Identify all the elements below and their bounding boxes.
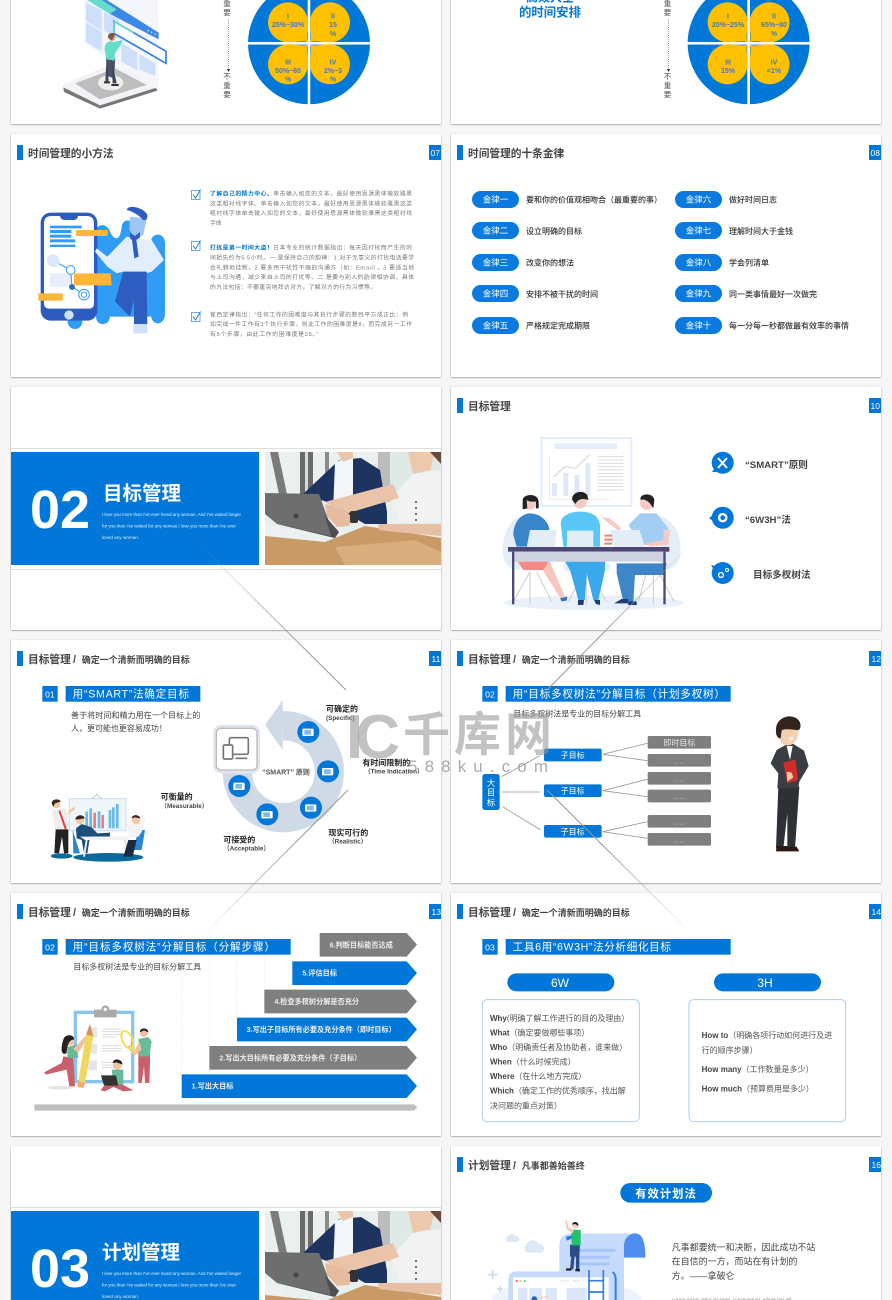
label: acceptable (223, 834, 270, 853)
blue title block: 03 (30, 1239, 90, 1299)
step 3 (237, 1018, 417, 1041)
tip 1: 粗衬线字体单击输入如您的文本，最好使用思源黑体微软雅黑这类粗衬线 (210, 209, 412, 217)
tip 2: 会礼貌地挂断，2.要多用干扰性不强的沟通方（如：Email），3.要适当地 (210, 263, 414, 271)
slide header (17, 145, 441, 160)
panel: slide 06 quadrant elite time (451, 0, 881, 124)
illustration: man with phone (38, 207, 165, 333)
pie: four quadrant time share: IV (771, 60, 778, 66)
pie: four quadrant time share: <1% (767, 68, 782, 75)
slide header: 确定一个清新而明确的目标 (82, 907, 190, 918)
slide header: 12 (872, 654, 881, 664)
leaf goals: …… (673, 838, 685, 844)
slide header: 16 (872, 1160, 881, 1170)
slide header: 08 (870, 148, 880, 158)
panel: section 02 cover (11, 387, 441, 630)
pie: four quadrant time share: III (725, 60, 731, 66)
slide header: / (73, 907, 76, 919)
tip 3: 如完成一件工作有3个执行步骤，则此工作的困难度是9，而完成另一工作 (210, 320, 412, 328)
slide header: / (73, 654, 76, 666)
rule 9: 金律九 (686, 288, 712, 298)
label: realistic (328, 827, 368, 845)
rule 3: 改变你的想法 (526, 258, 574, 268)
label: acceptable: （Acceptable） (223, 845, 270, 853)
card: 6W list: Which（确定工作的优秀顺序，找出解 (490, 1086, 626, 1096)
pie: four quadrant time share: 25%~30% (272, 22, 305, 29)
tip 2: 与上司沟通，减少来自上司的打扰等。二.是要与别人的韵律相协调，具体 (210, 273, 414, 281)
illustration: isometric man at window (63, 0, 166, 109)
axis: important to not important: 要 (664, 90, 672, 99)
quote: 方。——拿破仑 (672, 1270, 735, 1281)
pie: four quadrant time share (247, 0, 371, 105)
rule 3: 金律三 (483, 258, 508, 268)
pie: four quadrant time share: I (727, 14, 729, 20)
pie: four quadrant time share: II (331, 14, 335, 20)
tip 3: 有5个步骤，由此工作的困难度是25。” (210, 330, 318, 338)
tip 1: 了解自己的精力中心。单击输入如您的文本，最好使用思源黑体微软雅黑 (210, 190, 412, 198)
pie: four quadrant time share: % (330, 76, 337, 84)
rule 10 (675, 317, 849, 334)
card: 3H list (689, 1000, 846, 1122)
photo: two people at a laptop (265, 1211, 441, 1300)
pill: 3H: 3H (757, 976, 773, 990)
label: acceptable: 可接受的 (223, 834, 255, 844)
label: time indication: 有时间限制的 (362, 757, 410, 767)
step 1: 1.写出大目标 (192, 1082, 233, 1091)
label: realistic: （Realistic） (328, 837, 367, 845)
label: measurable (161, 792, 208, 810)
step 3: 3.写出子目标所有必要及充分条件（即时目标） (247, 1025, 396, 1034)
step 6 (320, 933, 417, 957)
slide header: 目标管理 (28, 906, 71, 919)
axis: important to not important: 要 (664, 8, 672, 17)
step heading 03: 03 (485, 942, 495, 952)
slide header: 目标管理 (468, 653, 511, 666)
step heading 02 (482, 686, 731, 702)
slide header: 确定一个清新而明确的目标 (522, 654, 630, 665)
slide header (17, 904, 441, 919)
illustration: businessman with red folder (771, 716, 809, 851)
watermark: 588ku logo and text: IC (346, 703, 400, 772)
leaf goals: …… (673, 759, 685, 765)
axis: important to not important: 要 (223, 90, 231, 99)
blue title block: 02 (30, 480, 90, 540)
label: realistic: 现实可行的 (328, 827, 368, 837)
tip 1: 这类粗衬线字体。单击输入如您的文本，最好使用思源黑体微软雅黑这类 (210, 199, 412, 207)
axis: important to not important (223, 0, 231, 99)
leaf goals: …… (673, 795, 685, 801)
rule 7 (675, 222, 793, 239)
pill: effective planning: 有效计划法 (635, 1187, 697, 1201)
tip 2: 的方法包括：不要唐突地拜访对方，了解对方的行为习惯等。 (210, 283, 376, 291)
tip 3 (192, 310, 412, 338)
root node: 目 (487, 788, 495, 798)
pie: four quadrant time share: 15% (721, 68, 736, 75)
pie: four quadrant time share: 20%~25% (712, 22, 745, 29)
photo: two people at a laptop (265, 452, 441, 565)
rule 6: 做好时间日志 (729, 194, 777, 204)
illustration: person on document with ladder (488, 1220, 645, 1300)
pie: four quadrant time share: 15 (329, 22, 337, 29)
item: goal tree (711, 562, 811, 584)
step 5: 5.评估目标 (302, 969, 337, 978)
description (71, 710, 200, 733)
rule 10: 金律十 (686, 320, 712, 330)
ring diagram: SMART cycle: “SMART” 原则 (262, 767, 310, 776)
panel: slide 13 decomposition steps (11, 893, 441, 1136)
watermark: 588ku logo and text: 588ku.com (408, 757, 548, 776)
blue title block (11, 1211, 259, 1300)
rule 1 (472, 191, 662, 208)
slide header: 时间管理的小方法 (28, 147, 114, 160)
leaf goals: …… (673, 820, 685, 826)
rule 8: 金律八 (686, 258, 712, 268)
label: time indication: （Time Indication） (364, 767, 423, 775)
illustration: business meeting (51, 794, 145, 862)
card: 6W list: 决问题的重点对策） (490, 1101, 562, 1111)
blue title block (11, 452, 259, 565)
pie: four quadrant time share: 50%~60 (275, 68, 301, 75)
slide header: / (513, 1160, 516, 1172)
pie: four quadrant time share: % (771, 31, 778, 38)
blue title block: loved any woman. (102, 1294, 139, 1299)
item: goal tree: 目标多杈树法 (753, 569, 811, 581)
rule 7: 金律七 (686, 226, 712, 236)
pill: effective planning (620, 1183, 712, 1203)
axis: important to not important: 不 (664, 72, 672, 81)
panel: slide 14 6W3H (451, 893, 881, 1136)
illustration: team meeting with chart (503, 438, 685, 610)
description: 人，更可能也更容易成功！ (71, 723, 167, 733)
card: 3H list: 行的顺序步骤） (702, 1045, 758, 1055)
tip 1: 字体 (210, 219, 222, 227)
step 5 (292, 961, 417, 985)
step heading 03: 工具6用“6W3H”法分析细化目标 (513, 941, 671, 954)
leaf goals: …… (673, 777, 685, 783)
item: SMART (712, 452, 808, 474)
step heading 01: 用“SMART”法确定目标 (73, 688, 189, 701)
step heading 02: 02 (45, 942, 55, 952)
panel: slide 08 ten golden rules (451, 134, 881, 377)
pill: 6W (507, 973, 614, 991)
step heading 02: 用“目标多杈树法”分解目标（分解步骤） (73, 941, 275, 954)
step 1 (182, 1074, 417, 1098)
rule 1: 要和你的价值观相吻合（最重要的事） (526, 194, 662, 204)
slide header: 目标管理 (468, 906, 511, 919)
list: time tips (192, 190, 414, 338)
slide header: 计划管理 (468, 1159, 511, 1172)
label: specific: (Specific) (326, 715, 354, 722)
panel: slide 12 goal tree (451, 640, 881, 883)
description: 目标多杈树法是专业的目标分解工具 (513, 708, 641, 718)
rule 5: 金律五 (483, 320, 509, 330)
rule 9: 同一类事情最好一次做完 (729, 289, 817, 299)
illustration: team with clipboard and pencil (44, 1005, 152, 1091)
quote: 凡事都要统一和决断，因此成功不站 (672, 1241, 815, 1252)
step heading 02 (42, 939, 291, 955)
rule 9 (675, 285, 817, 302)
rule 6 (675, 191, 777, 208)
root node (482, 774, 500, 810)
slide header (457, 398, 881, 413)
card: 3H list: How to（明确各项行动如何进行及进 (702, 1030, 832, 1040)
card: 6W list: Who（明确责任者及协助者，谁来做） (490, 1042, 627, 1052)
blue title block: for you than I've waited for any woman.I love you more than I've ever (102, 1282, 236, 1288)
rule 4 (472, 285, 598, 302)
pie: four quadrant time share: I (287, 14, 289, 20)
card: 6W list: Where（在什么地方完成） (490, 1071, 586, 1081)
rule 6: 金律六 (686, 194, 712, 204)
slide header: 14 (872, 907, 881, 917)
item: 6W3H (709, 507, 791, 529)
card: 6W list: When（什么时候完成） (490, 1057, 576, 1067)
axis: important to not important: 要 (223, 8, 231, 17)
step 4: 4.检查多杈树分解是否充分 (274, 997, 359, 1006)
step heading 01 (42, 686, 200, 702)
panel: slide 10 goal management overview (451, 387, 881, 630)
card: 6W list: Why(明确了解工作进行的目的及理由） (490, 1013, 629, 1023)
watermark: 588ku logo and text: 千库网 (403, 708, 556, 761)
tip 2 (192, 240, 414, 291)
label: specific (326, 704, 358, 722)
base arrow (34, 1104, 417, 1111)
step 2 (209, 1046, 417, 1070)
label: time indication (362, 757, 423, 775)
label: measurable: （Measurable） (161, 802, 208, 810)
axis: important to not important: 不 (223, 72, 231, 81)
slide header (457, 145, 881, 160)
panel: section 03 cover (11, 1146, 441, 1300)
slide header (457, 651, 881, 666)
root node: 标 (487, 797, 495, 807)
pie: four quadrant time share: 65%~80 (761, 22, 787, 29)
pie: four quadrant time share (687, 0, 811, 105)
card: 6W list (482, 1000, 639, 1122)
slide header: / (513, 654, 516, 666)
rule 4: 安排不被干扰的时间 (526, 289, 598, 299)
slide header (17, 651, 441, 666)
slide header: 目标管理 (468, 400, 511, 413)
heading: time arrangement: 的时间安排 (519, 4, 582, 20)
tree diagram (482, 736, 711, 846)
slide header: 13 (432, 907, 441, 917)
item: SMART: “SMART”原则 (745, 459, 808, 471)
rule 5 (472, 317, 590, 334)
rule 8 (675, 254, 769, 271)
step heading 02: 02 (485, 689, 495, 699)
slide header (457, 904, 881, 919)
slide header: 11 (432, 654, 441, 664)
rule 5: 严格规定完成期限 (526, 320, 590, 330)
description: 目标多杈树法是专业的目标分解工具 (73, 961, 201, 971)
pie: four quadrant time share: % (330, 31, 337, 38)
watermark: 588ku logo and text (195, 540, 693, 935)
step 4 (264, 990, 417, 1013)
quote (672, 1241, 815, 1300)
blue title block: 计划管理 (102, 1241, 180, 1264)
pie: four quadrant time share: % (285, 76, 292, 84)
pie: four quadrant time share: III (285, 60, 291, 66)
tip 2: 间损失约为5.5小时。一.是保持自己的韵律：1.对于无意义的打扰电话要学 (210, 253, 414, 261)
description: 善于将时间和精力用在一个目标上的 (71, 710, 200, 720)
rule 1: 金律一 (483, 194, 509, 204)
axis: important to not important: 重 (664, 81, 672, 90)
axis: important to not important (664, 0, 672, 99)
tip 2: 打扰是第一时间大盗！日本专业的统计数据指出：每天因打扰而产生的时 (210, 244, 412, 252)
blue title block: for you than I've waited for any woman.I love you more than I've ever (102, 524, 236, 528)
panel: slide 07 small methods (11, 134, 441, 377)
sub goals (544, 749, 602, 838)
slide header: 目标管理 (28, 653, 71, 666)
slide header: 10 (870, 401, 880, 411)
slide header: 凡事都善始善终 (522, 1160, 585, 1171)
quote: 在自信的一方，而站在有计划的 (672, 1256, 797, 1267)
pie: four quadrant time share: II (772, 14, 776, 20)
rule 10: 每一分每一秒都做最有效率的事情 (729, 320, 849, 330)
step heading 02: 用“目标多杈树法”分解目标（计划多杈树） (513, 688, 725, 701)
leaf goals: 即时目标 (663, 737, 695, 747)
panel: slide 16 plan management (451, 1146, 881, 1300)
root node: 大 (487, 778, 495, 788)
slide header: / (513, 907, 516, 919)
rule 7: 理解时间大于金钱 (729, 226, 793, 236)
axis: important to not important: 重 (223, 81, 231, 90)
panel: slide 11 SMART (11, 640, 441, 883)
sub goals: 子目标 (561, 750, 585, 760)
pie: four quadrant time share: 2%~3 (324, 68, 342, 75)
pill: 3H (714, 973, 821, 991)
pill: 6W: 6W (551, 976, 570, 990)
ring diagram: SMART cycle (213, 700, 339, 825)
tip 3: 崔西定律指出：“任何工作的困难度与其执行步骤的数目平方成正比：例 (210, 310, 408, 318)
sub goals: 子目标 (561, 826, 585, 836)
card: 3H list: How much（预算费用是多少） (702, 1084, 814, 1094)
label: specific: 可确定的 (326, 704, 358, 714)
step heading 03 (482, 939, 731, 955)
label: measurable: 可衡量的 (161, 792, 193, 802)
sub goals: 子目标 (561, 786, 585, 796)
slide header: 07 (430, 148, 440, 158)
rule 2 (472, 222, 582, 239)
slide header: 确定一个清新而明确的目标 (82, 654, 190, 665)
rule 3 (472, 254, 574, 271)
item: 6W3H: “6W3H”法 (745, 514, 791, 526)
rule 4: 金律四 (483, 288, 508, 298)
blue title block: loved any woman. (102, 535, 139, 540)
rule 2: 金律二 (483, 226, 509, 236)
blue title block: I love you more than I've ever loved any woman. And I've waited longer (102, 512, 241, 517)
tip 1 (192, 190, 412, 227)
slide header: 确定一个清新而明确的目标 (522, 907, 630, 918)
pie: four quadrant time share: IV (330, 60, 337, 66)
panel: slide 05 quadrant personal time (11, 0, 441, 124)
leaf goals (648, 736, 711, 846)
blue title block: I love you more than I've ever loved any woman. And I've waited longer (102, 1271, 241, 1276)
step 2: 2.写出大目标所有必要及充分条件（子目标） (219, 1053, 361, 1062)
rule 8: 学会列清单 (729, 258, 769, 268)
rule 2: 设立明确的目标 (526, 226, 582, 236)
slide header: 时间管理的十条金律 (468, 147, 565, 160)
slide header (457, 1157, 881, 1172)
card: 3H list: How many（工作数量是多少） (702, 1064, 813, 1074)
step 6: 6.判断目标能否达成 (330, 940, 393, 949)
card: 6W list: What（确定要做哪些事项） (490, 1028, 589, 1038)
blue title block: 目标管理 (103, 482, 181, 505)
step heading 01: 01 (45, 689, 55, 699)
